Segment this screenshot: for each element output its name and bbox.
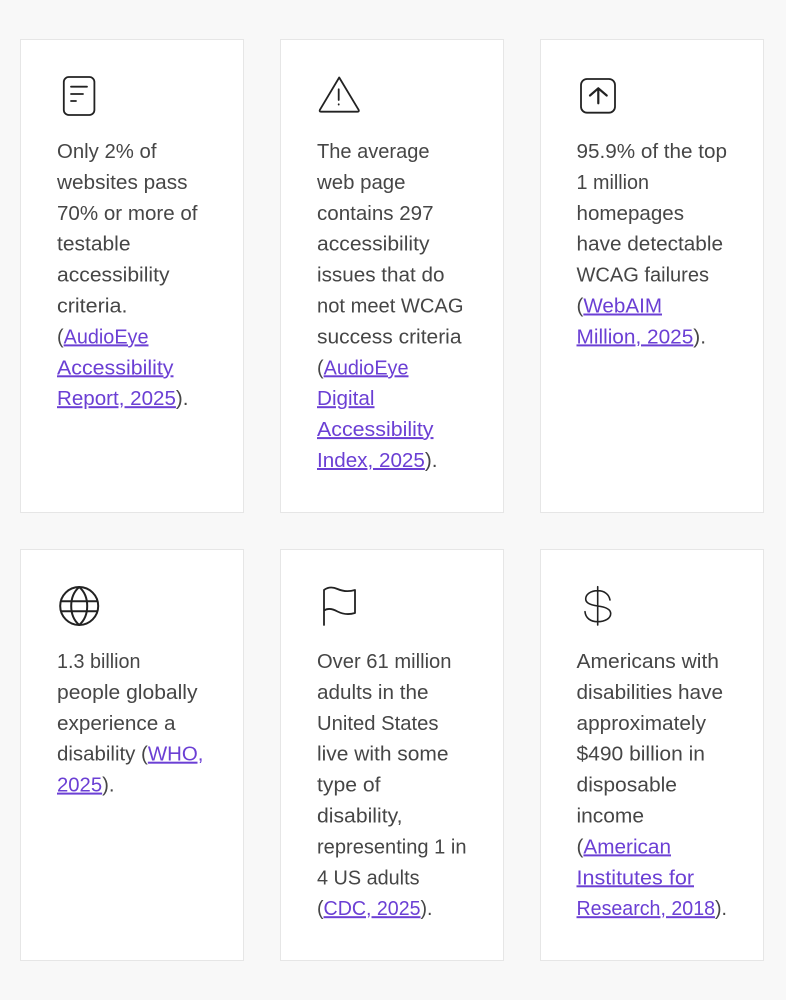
text: 61 million adults: adults in the — [317, 682, 428, 704]
text: 61 million adults: 4 US adults — [317, 867, 420, 889]
text: issues per page: accessibility — [317, 234, 430, 256]
text: 61 million adults: Over 61 million — [317, 651, 452, 673]
text: WCAG failures: WCAG failures — [576, 265, 709, 287]
text: 61 million adults: type of — [317, 775, 381, 797]
text: issues per page: Accessibility — [317, 419, 434, 441]
text: website pass rate: Report, 2025). — [57, 388, 188, 410]
text: website pass rate — [56, 141, 198, 410]
icon: upload arrow in square — [580, 78, 616, 114]
text: website pass rate: criteria. — [57, 296, 128, 318]
text: issues per page: success criteria — [317, 326, 462, 348]
text: website pass rate: Accessibility — [57, 357, 174, 379]
icon: warning triangle — [318, 76, 360, 113]
text: website pass rate: testable — [57, 234, 130, 256]
text: issues per page: Index, 2025). — [317, 450, 437, 472]
text: WCAG failures: homepages — [576, 203, 684, 225]
text: 61 million adults: disability, — [317, 806, 403, 828]
text: 1.3 billion people: disability (WHO, — [57, 744, 204, 766]
text: 61 million adults: representing 1 in — [317, 836, 466, 858]
text: $490 billion — [576, 651, 727, 920]
icon: document — [62, 76, 96, 116]
text: $490 billion: (American — [576, 836, 671, 858]
text: issues per page: The average — [317, 141, 429, 163]
text: 1.3 billion people: 1.3 billion — [57, 651, 140, 673]
text: 61 million adults: United States — [317, 713, 439, 735]
text: issues per page: issues that do — [317, 265, 445, 287]
text: $490 billion: income — [576, 806, 644, 828]
panel: average accessibility issues — [280, 39, 504, 513]
text: issues per page: web page — [316, 172, 405, 194]
panel: global disability population — [20, 549, 244, 961]
icon: dollar sign — [584, 586, 612, 626]
text: issues per page — [316, 141, 464, 472]
icon: flag — [323, 586, 356, 626]
text: website pass rate: accessibility — [57, 265, 170, 287]
panel: only 2% of websites pass — [20, 39, 244, 513]
panel: homepages with WCAG failures — [540, 39, 764, 513]
text: WCAG failures: 95.9% of the top — [576, 141, 727, 163]
panel: disposable income — [540, 549, 764, 961]
text: WCAG failures: 1 million — [576, 172, 649, 194]
text: issues per page: Digital — [317, 388, 375, 410]
text: 61 million adults: live with some — [317, 744, 448, 766]
text: WCAG failures: have detectable — [576, 234, 723, 256]
text: $490 billion: disabilities have — [576, 682, 723, 704]
text: $490 billion: approximately — [576, 713, 706, 735]
icon: globe — [59, 586, 100, 626]
text: website pass rate: websites pass — [56, 172, 187, 194]
text: $490 billion: $490 billion in — [576, 744, 705, 766]
text: 61 million adults — [317, 651, 466, 920]
text: 61 million adults: (CDC, 2025). — [317, 898, 432, 920]
text: $490 billion: Institutes for — [576, 867, 694, 889]
text: issues per page: (AudioEye — [317, 357, 408, 379]
text: 1.3 billion people: people globally — [57, 682, 198, 704]
text: issues per page: not meet WCAG — [317, 296, 464, 318]
panel: US adults with disabilities — [280, 549, 504, 961]
text: 1.3 billion people: experience a — [57, 713, 176, 735]
text: website pass rate: 70% or more of — [57, 203, 198, 225]
text: website pass rate: (AudioEye — [57, 326, 148, 348]
text: 1.3 billion people — [57, 651, 204, 797]
text: $490 billion: Research, 2018). — [576, 898, 727, 920]
text: WCAG failures — [576, 141, 727, 348]
text: website pass rate: Only 2% of — [57, 141, 157, 163]
text: WCAG failures: Million, 2025). — [576, 326, 706, 348]
text: $490 billion: disposable — [576, 775, 677, 797]
text: $490 billion: Americans with — [576, 651, 719, 673]
text: 1.3 billion people: 2025). — [57, 775, 114, 797]
text: WCAG failures: (WebAIM — [576, 296, 662, 318]
text: issues per page: contains 297 — [317, 203, 434, 225]
